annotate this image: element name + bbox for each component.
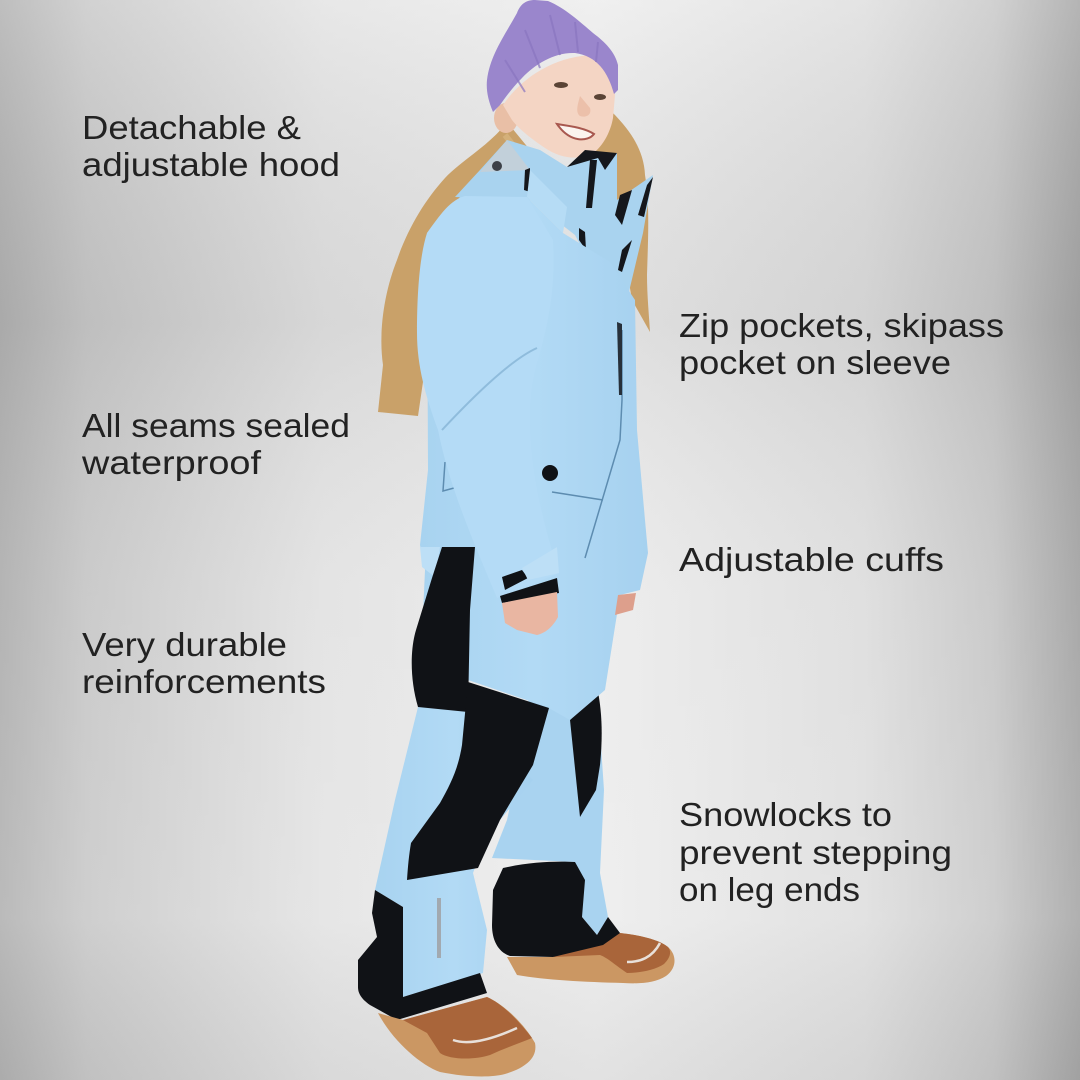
label: snowlocks: Snowlocks to [679,796,892,833]
eyes [554,82,606,100]
ear [494,103,518,133]
reflective strip [437,898,441,958]
sleeve shading [442,348,537,430]
label: snowlocks line 3: on leg ends [679,871,860,908]
hand [502,592,558,635]
label: hood line 2: adjustable hood [82,146,340,183]
back boot [507,933,675,983]
torso [420,197,648,720]
front leg cuff [358,890,487,1020]
label: reinforcements: Very durable [82,626,287,663]
far hand [615,593,636,615]
collar and hood [455,140,653,300]
pocket button [542,465,558,481]
icon: purple beanie [487,0,618,112]
hair [378,112,650,416]
mouth [557,124,594,139]
label: seams line 2: waterproof [81,444,262,481]
label: cuffs: Adjustable cuffs [679,541,944,578]
hip pocket flap [420,547,440,577]
figure: child in blue ski overall [358,0,675,1076]
front leg [375,707,533,997]
back leg cuff [492,862,620,957]
label: detachable hood: Detachable & [82,109,301,146]
sleeve [417,196,559,598]
label: seams: All seams sealed [82,407,350,444]
knee reinforcement [407,682,549,880]
front boot [378,997,535,1076]
label: reinforcements line 2: reinforcements [82,663,326,700]
cuff strap [502,570,528,590]
label: zip pockets line 2: pocket on sleeve [679,344,951,381]
label: zip pockets: Zip pockets, skipass [679,307,1004,344]
label: snowlocks line 2: prevent stepping [679,834,952,871]
torso seams [443,330,622,558]
upper hip reinforcement [412,547,475,712]
back leg [492,687,608,935]
back leg reinforcement [570,687,602,817]
nose [577,96,590,117]
face [503,55,615,158]
